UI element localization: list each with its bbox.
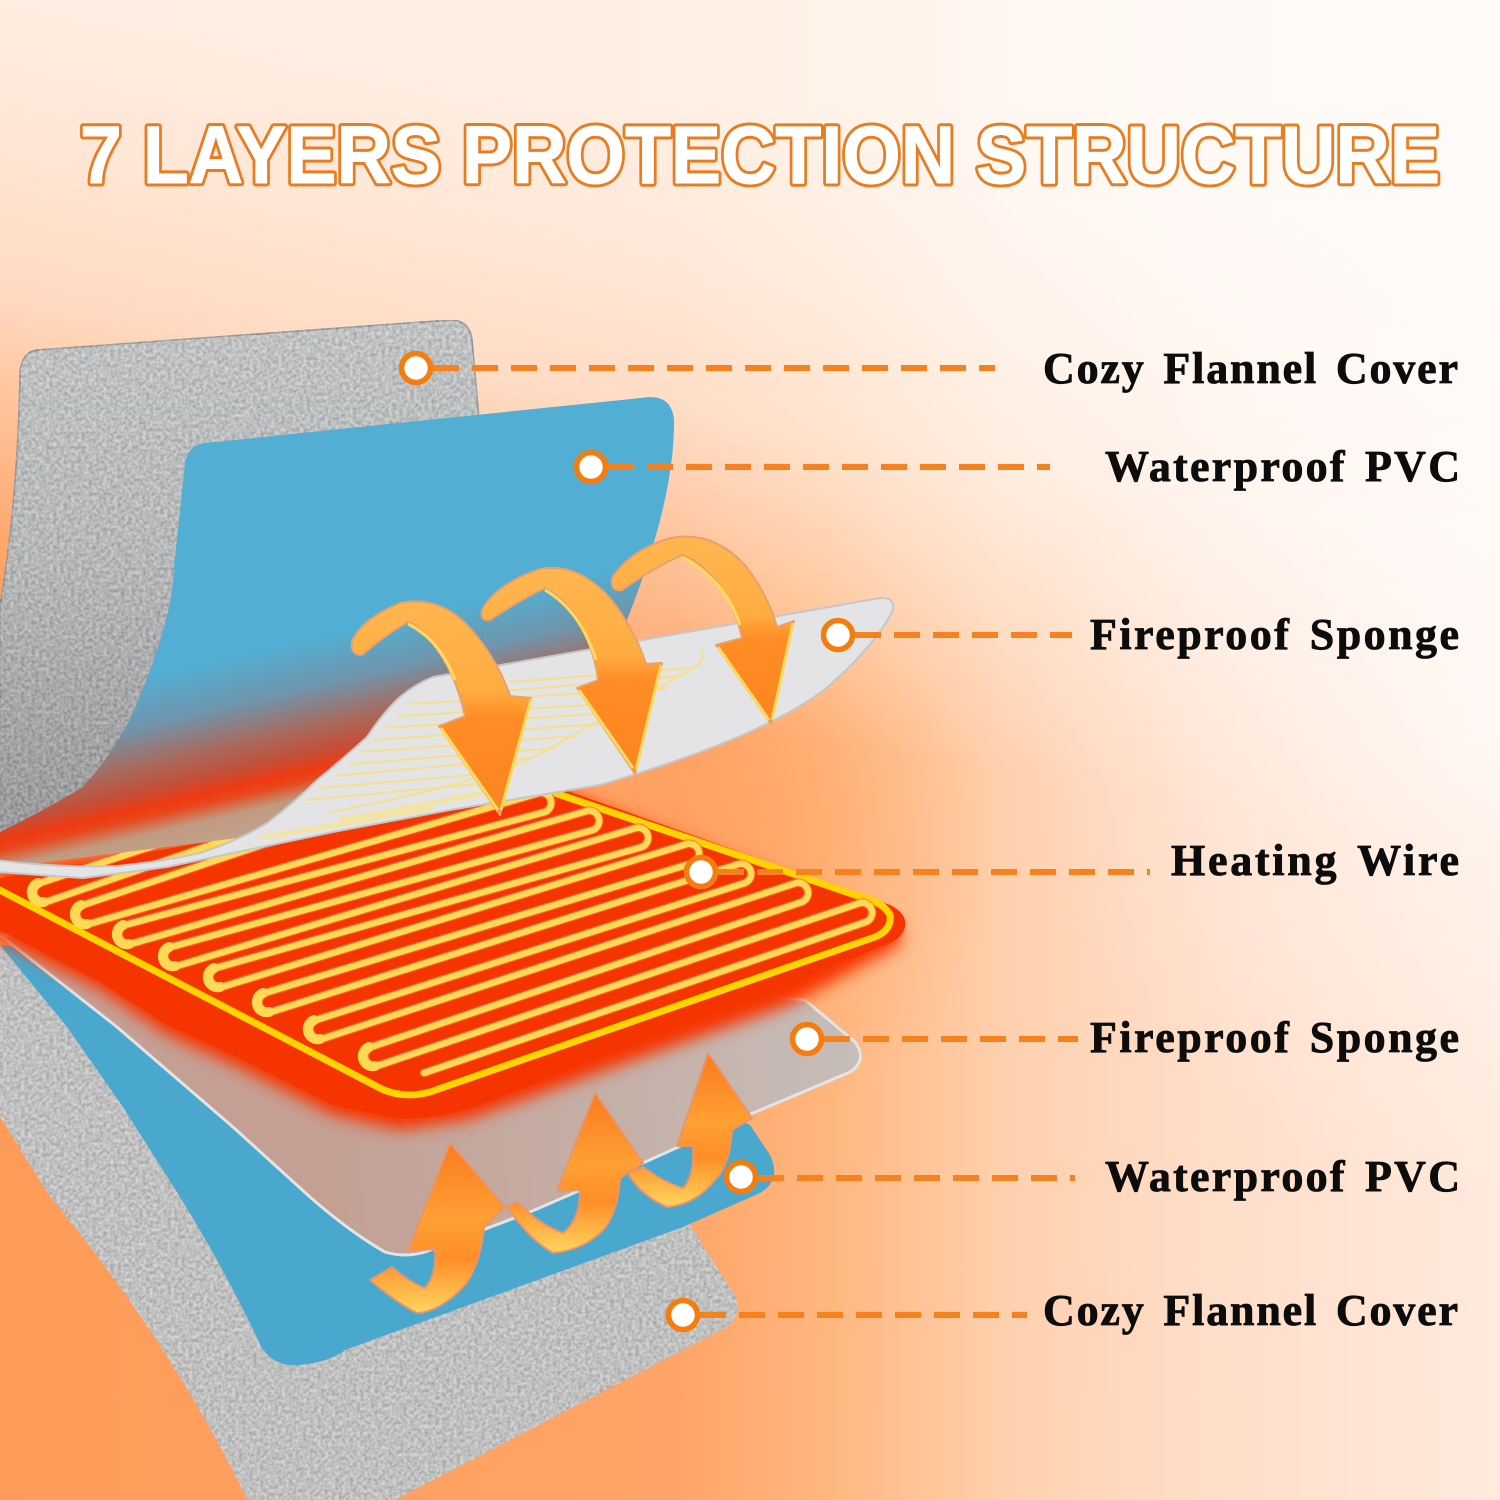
- callout: Fireproof Sponge (bottom): [792, 1013, 1459, 1062]
- callout: Heating Wire: Heating Wire: [1171, 836, 1459, 885]
- arrow up 1: [370, 1143, 505, 1313]
- callout: Fireproof Sponge (bottom): Fireproof Sponge: [1090, 1013, 1459, 1062]
- callout: Waterproof PVC (bottom): Waterproof PVC: [1105, 1152, 1460, 1201]
- callout: Cozy Flannel Cover (top): [402, 344, 1458, 393]
- arrow down 2: [482, 568, 662, 774]
- arrow up 2: [507, 1093, 643, 1253]
- layer: upper fireproof sponge: [0, 598, 893, 878]
- callout: Fireproof Sponge (top): [824, 610, 1459, 659]
- callout: Waterproof PVC (top): [576, 442, 1460, 491]
- arrow down 3: [612, 537, 794, 724]
- pad body: [0, 783, 905, 1118]
- arrow down 1: [352, 601, 531, 815]
- callout: Heating Wire: [686, 836, 1459, 886]
- callout: Fireproof Sponge (top): Fireproof Sponge: [1090, 610, 1459, 659]
- serpentine wire halo: [34, 745, 872, 1073]
- callout: Waterproof PVC (top): Waterproof PVC: [1105, 442, 1460, 491]
- callout: Cozy Flannel Cover (bottom): [668, 1286, 1458, 1335]
- layer: lower fireproof sponge: [0, 935, 860, 1255]
- heat arrows: upward: [370, 1053, 752, 1313]
- callout: Cozy Flannel Cover (bottom): Cozy Flannel Cover: [1043, 1286, 1458, 1335]
- callout: Waterproof PVC (bottom): [726, 1152, 1460, 1201]
- pad yellow border: [0, 788, 890, 1095]
- wire imprint glow: [260, 790, 500, 838]
- thickened left bends: [32, 883, 375, 1066]
- callout: Cozy Flannel Cover (top): Cozy Flannel Cover: [1043, 344, 1458, 393]
- layer: lower waterproof PVC: [0, 945, 774, 1365]
- layer: upper flannel cover: [0, 320, 480, 840]
- heat arrows: downward: [352, 537, 794, 815]
- sponge sheet: [0, 598, 893, 878]
- pad glow: [0, 790, 900, 1130]
- layer: upper waterproof PVC: [0, 397, 674, 868]
- faint wire imprint: [305, 650, 702, 812]
- layer: heating wire pad: [0, 745, 905, 1130]
- serpentine wire: [34, 745, 872, 1073]
- arrow up 3: [628, 1053, 752, 1207]
- layer: lower flannel cover: [0, 945, 738, 1500]
